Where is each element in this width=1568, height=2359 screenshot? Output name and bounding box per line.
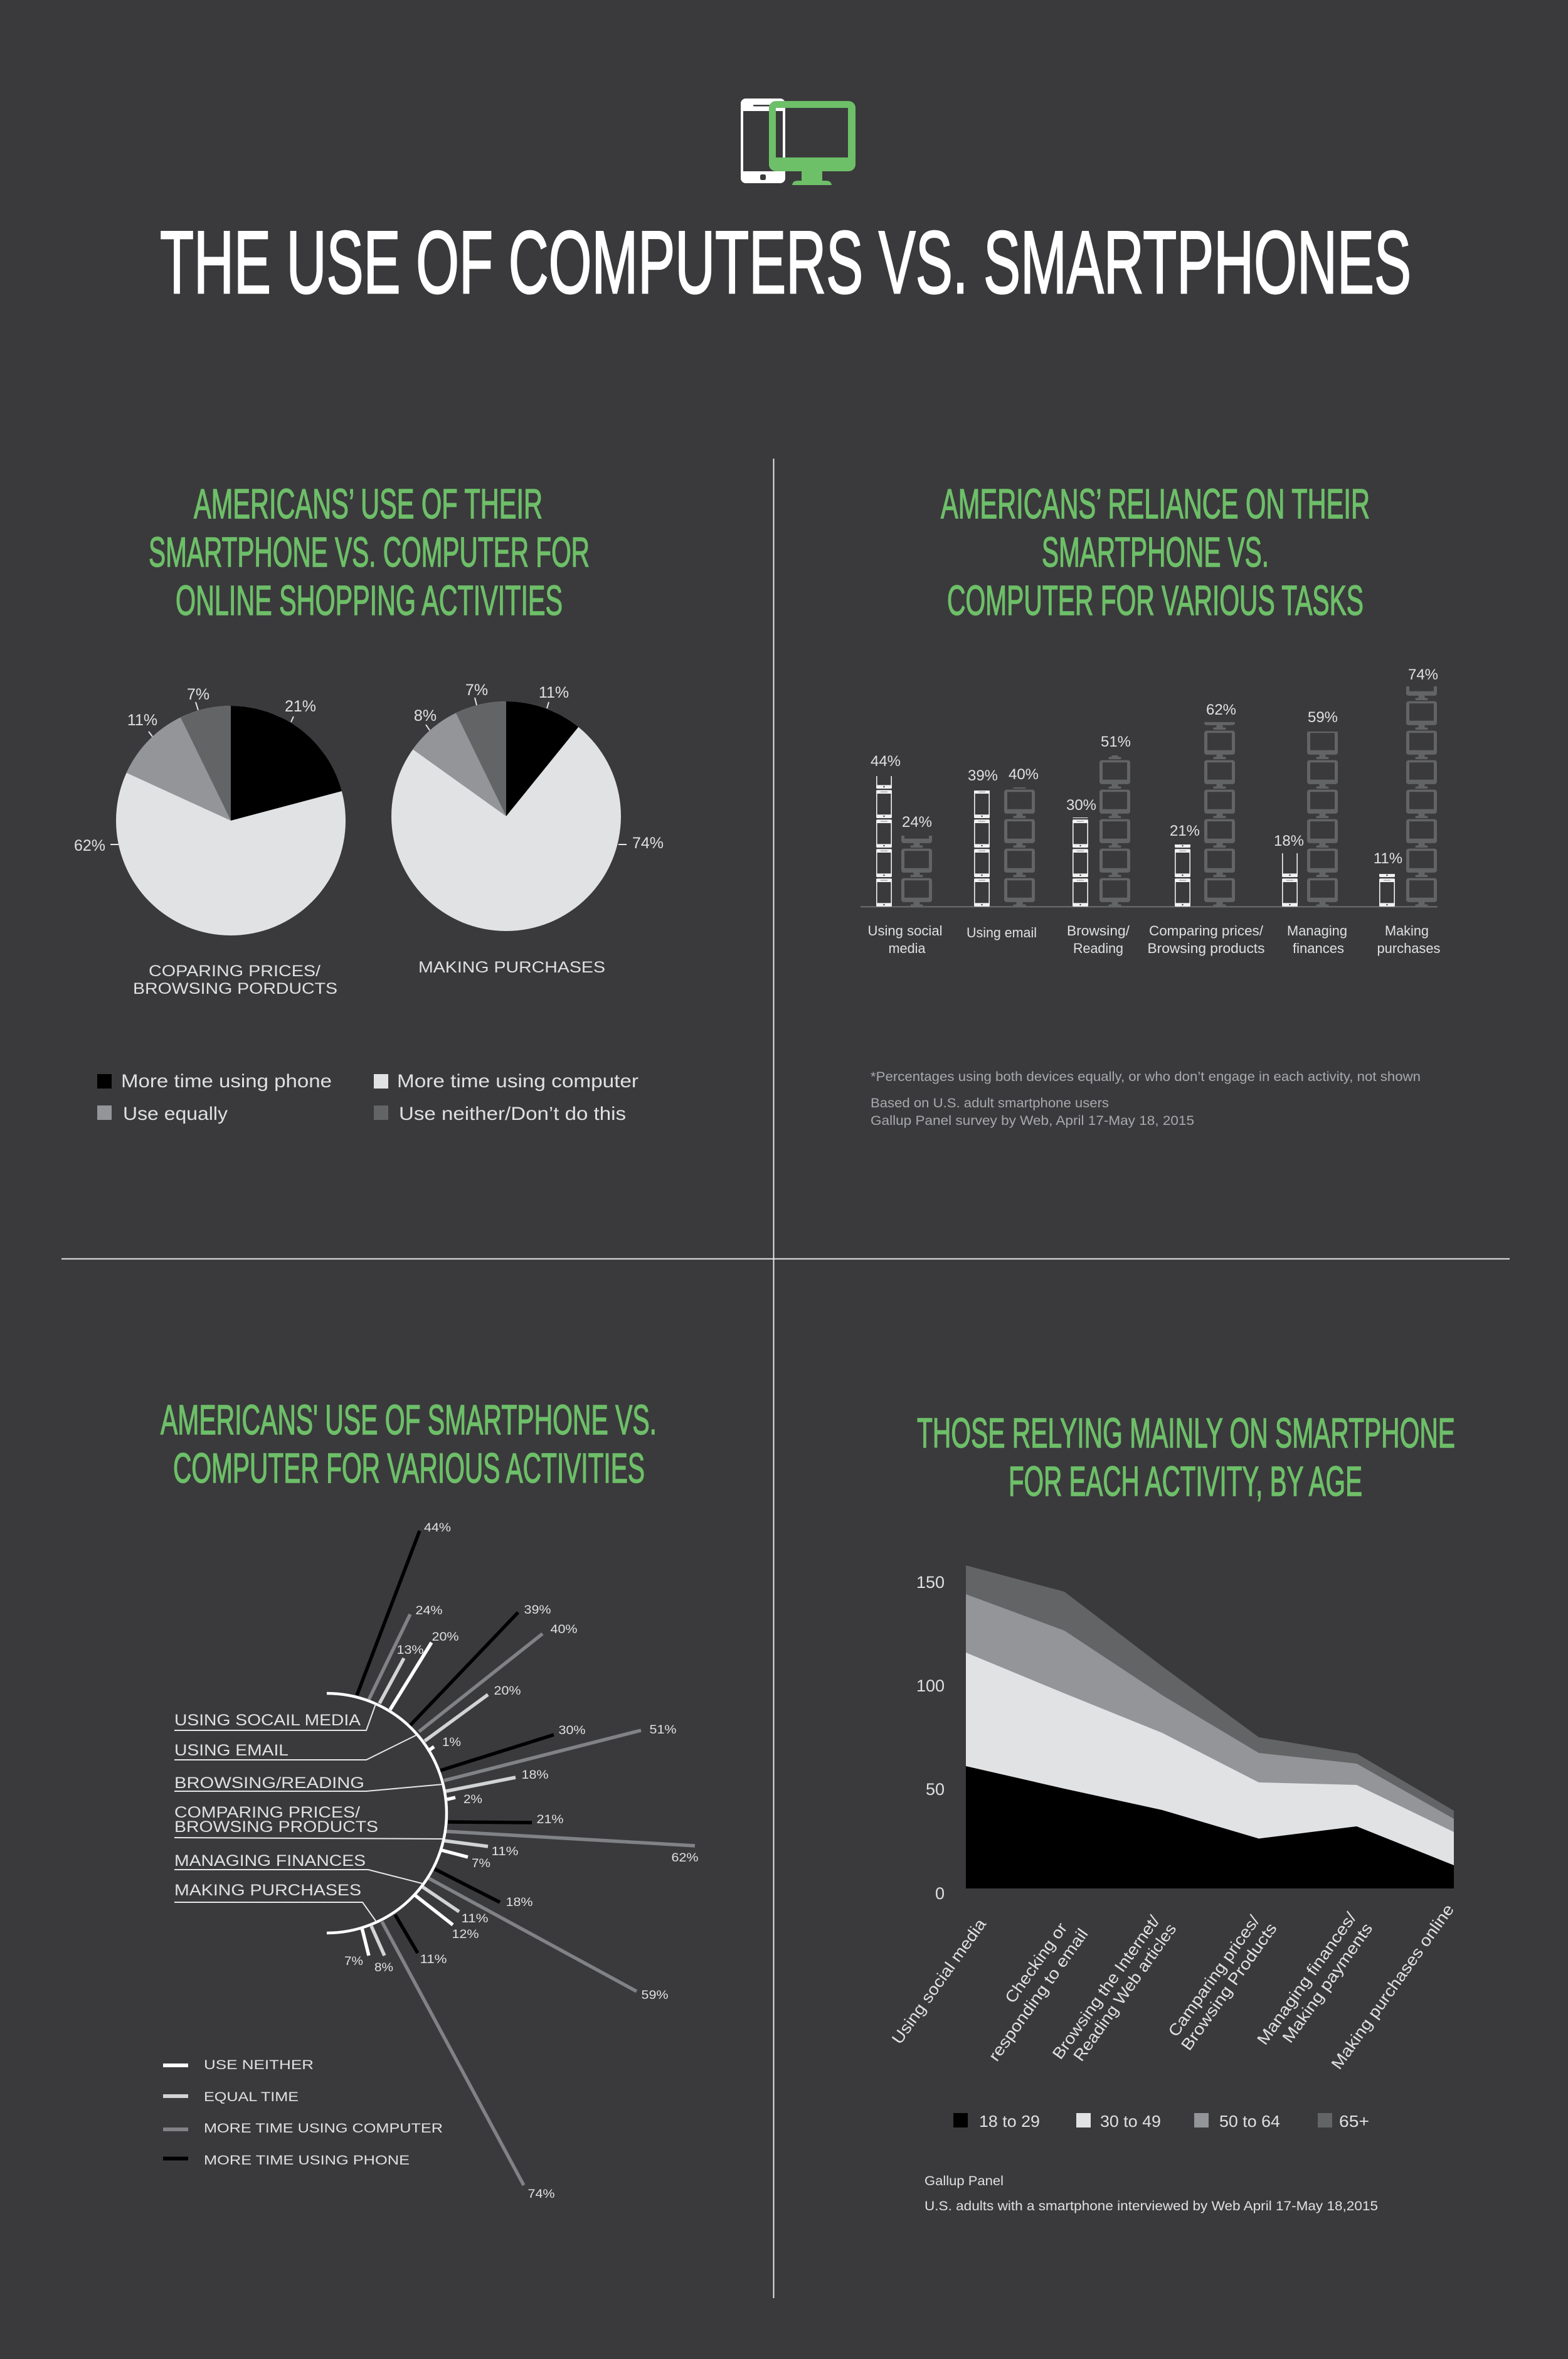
footnote	[871, 1070, 1421, 1128]
stacked area chart: 0	[935, 1884, 945, 1903]
radial bar chart: 11%	[492, 1845, 519, 1858]
heading: online shopping: SMARTPHONE VS. COMPUTER FOR	[149, 529, 590, 576]
radial bar chart: 24%	[415, 1604, 443, 1617]
pie chart: comparing prices: 62%	[74, 837, 105, 855]
radial bar chart: 12%	[452, 1928, 479, 1941]
radial bar chart: 18%	[506, 1896, 533, 1909]
heading: online shopping: AMERICANS’ USE OF THEIR	[194, 481, 543, 528]
pie chart: comparing prices: 21%	[285, 698, 316, 715]
radial category labels: MANAGING FINANCES	[174, 1852, 366, 1870]
pictogram chart: 18%	[1274, 833, 1304, 849]
legend: age groups: 18 to 29	[979, 2112, 1040, 2131]
pictogram chart: 39%	[968, 767, 998, 784]
heading: various activities: AMERICANS' USE OF SMARTPHONE VS.	[161, 1397, 657, 1444]
legend: radial chart: EQUAL TIME	[204, 2090, 299, 2104]
radial bar chart: 51%	[650, 1723, 677, 1737]
legend: age groups	[953, 2112, 1369, 2131]
legend: pie charts: More time using phone	[121, 1071, 332, 1092]
area chart axis labels: Browsing Products	[1177, 1919, 1281, 2054]
heading: online shopping	[149, 481, 590, 624]
panel: smartphone reliance by age	[887, 1410, 1458, 2213]
area chart axis labels: Making payments	[1278, 1919, 1376, 2047]
stacked area chart: 150	[916, 1573, 945, 1592]
heading: various activities	[161, 1397, 657, 1492]
heading: by age	[917, 1410, 1455, 1505]
footnote: Based on U.S. adult smartphone users	[871, 1096, 1109, 1110]
panel: reliance on various tasks	[861, 481, 1440, 1128]
radial bar chart: 39%	[524, 1604, 551, 1617]
pictogram chart: 44%	[871, 753, 901, 770]
radial bar chart: 59%	[641, 1989, 669, 2002]
radial category labels: BROWSING/READING	[174, 1774, 364, 1792]
chart category labels: Browsing products	[1148, 940, 1264, 956]
pictogram chart: 74%	[1408, 666, 1438, 683]
chart category labels: Reading	[1073, 940, 1123, 956]
legend: radial chart	[163, 2058, 443, 2168]
legend: age groups: 30 to 49	[1100, 2112, 1161, 2131]
radial bar chart: 18%	[522, 1769, 549, 1782]
legend: age groups: 50 to 64	[1219, 2112, 1280, 2131]
radial bar chart: 30%	[558, 1724, 586, 1737]
source note	[924, 2174, 1378, 2213]
pie chart: comparing prices	[74, 686, 346, 935]
legend: pie charts: Use equally	[123, 1104, 228, 1124]
radial category labels: USING EMAIL	[174, 1742, 289, 1759]
radial bar chart: 8%	[374, 1961, 393, 1974]
chart category labels: Using email	[967, 925, 1037, 940]
area chart axis labels: Browsing the Internet/	[1048, 1911, 1163, 2063]
chart category labels: Making	[1385, 923, 1429, 939]
chart category labels: media	[888, 940, 926, 956]
pie chart: making purchases: 8%	[414, 707, 437, 725]
radial bar chart: 44%	[424, 1521, 451, 1535]
legend: radial chart: USE NEITHER	[204, 2058, 314, 2072]
chart category labels: Comparing prices/	[1149, 923, 1264, 939]
chart category labels: finances	[1293, 940, 1344, 956]
pictogram chart: 40%	[1009, 766, 1039, 783]
radial bar chart: 40%	[551, 1623, 578, 1636]
radial bar chart: 62%	[671, 1851, 699, 1865]
legend: radial chart: MORE TIME USING COMPUTER	[204, 2121, 443, 2136]
radial bar chart: 21%	[537, 1813, 564, 1826]
radial bar chart: 1%	[442, 1736, 461, 1749]
legend: age groups: 65+	[1339, 2112, 1369, 2131]
pie chart: making purchases: 11%	[539, 684, 569, 701]
heading: reliance	[941, 481, 1370, 624]
source note: Gallup Panel	[924, 2174, 1004, 2188]
heading: online shopping: ONLINE SHOPPING ACTIVITIES	[176, 577, 563, 624]
pie chart: making purchases: 7%	[465, 681, 488, 699]
heading: various activities: COMPUTER FOR VARIOUS ACTIVITIES	[173, 1445, 645, 1492]
pictogram chart: 51%	[1101, 733, 1131, 750]
radial category labels: USING SOCAIL MEDIA	[174, 1712, 361, 1729]
radial bar chart: 20%	[432, 1631, 459, 1644]
radial bar chart: 20%	[494, 1685, 521, 1698]
radial bar chart: 11%	[462, 1912, 489, 1925]
legend: pie charts	[97, 1071, 638, 1124]
pie label: comparing prices: COPARING PRICES/	[149, 962, 320, 980]
pictogram chart: 30%	[1066, 797, 1096, 814]
chart category labels: Using social	[868, 923, 942, 939]
legend: pie charts: More time using computer	[397, 1071, 638, 1092]
area chart axis labels: Making purchases online	[1327, 1900, 1458, 2073]
legend: radial chart: MORE TIME USING PHONE	[204, 2153, 410, 2168]
pie chart: comparing prices: 7%	[187, 686, 209, 703]
radial bar chart	[327, 1521, 699, 2201]
pie label: comparing prices: BROWSING PORDUCTS	[133, 980, 337, 998]
radial category labels: COMPARING PRICES/	[174, 1804, 360, 1821]
pictogram chart: 59%	[1308, 709, 1338, 726]
area chart axis labels: Reading Web articles	[1069, 1920, 1180, 2065]
radial bar chart: 7%	[344, 1955, 363, 1968]
radial category labels: MAKING PURCHASES	[174, 1882, 361, 1899]
pie label: making purchases: MAKING PURCHASES	[418, 959, 605, 976]
panel: online shopping activities	[74, 481, 664, 1124]
radial category labels: BROWSING PRODUCTS	[174, 1818, 378, 1836]
icon: smartphone and computer monitor	[741, 99, 856, 185]
pictogram chart: 11%	[1374, 850, 1402, 867]
area chart axis labels: Checking or	[1001, 1919, 1071, 2006]
chart category labels	[868, 923, 1440, 956]
legend: pie charts: Use neither/Don’t do this	[399, 1104, 626, 1124]
pie chart: making purchases: 74%	[632, 834, 664, 852]
pictogram chart: 21%	[1170, 823, 1200, 839]
panel: various activities radial chart	[161, 1397, 699, 2201]
pictogram chart: 24%	[902, 814, 932, 831]
chart category labels: Browsing/	[1067, 923, 1130, 939]
source note: U.S. adults with a smartphone interviewed by Web April 17-May 18,2015	[924, 2199, 1378, 2213]
stacked area chart	[916, 1565, 1454, 1903]
radial category labels	[174, 1704, 443, 1922]
chart category labels: Managing	[1287, 923, 1347, 939]
footnote: *Percentages using both devices equally, or who don’t engage in each activity, not shown	[871, 1070, 1421, 1084]
pie label: comparing prices	[133, 962, 337, 998]
stacked area chart: 100	[916, 1676, 945, 1695]
radial bar chart: 2%	[464, 1793, 482, 1806]
radial bar chart: 11%	[420, 1953, 447, 1966]
area chart axis labels: Managing finances/	[1253, 1908, 1360, 2048]
pie chart: making purchases	[391, 681, 664, 931]
area chart axis labels: Using social media	[887, 1915, 990, 2048]
heading: reliance: SMARTPHONE VS.	[1042, 529, 1269, 576]
area chart axis labels: responding to email	[985, 1925, 1092, 2065]
area chart axis labels	[887, 1900, 1458, 2073]
footnote: Gallup Panel survey by Web, April 17-May 18, 2015	[871, 1114, 1194, 1128]
stacked area chart: 50	[926, 1780, 945, 1799]
pictogram chart: 62%	[1206, 701, 1236, 718]
area chart axis labels: Camparing prices/	[1164, 1911, 1264, 2040]
radial bar chart: 13%	[396, 1644, 424, 1657]
chart category labels: purchases	[1377, 940, 1440, 956]
radial bar chart: 74%	[528, 2188, 555, 2201]
pie chart: comparing prices: 11%	[127, 711, 157, 729]
radial bar chart: 7%	[472, 1857, 490, 1870]
pictogram chart	[861, 666, 1438, 907]
